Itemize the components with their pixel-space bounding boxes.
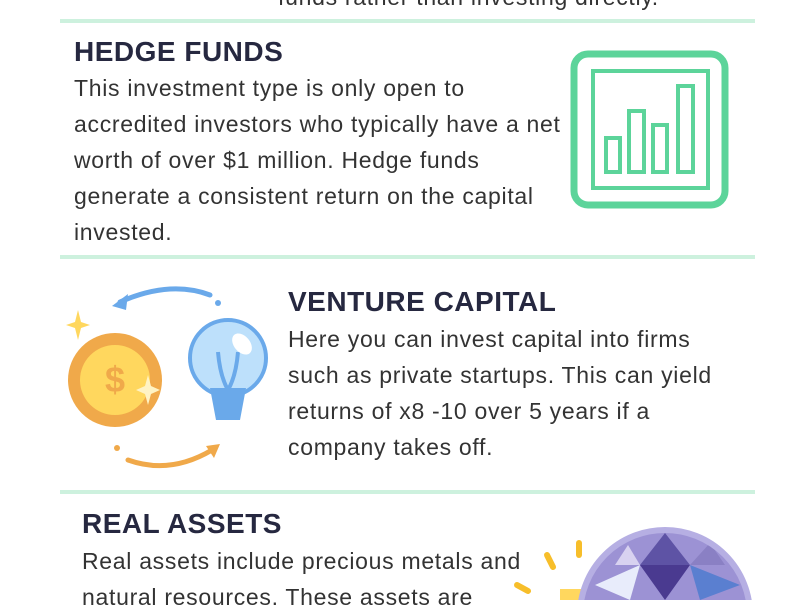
text: venture capital: such as private startups. This can yield [288,362,712,388]
text: venture capital: company takes off. [288,434,493,460]
heading: hedge funds: HEDGE FUNDS [74,36,283,67]
icon: venture coin and bulb [66,286,268,468]
text: real assets: natural resources. These assets are [82,584,473,610]
text: hedge funds: accredited investors who typically have a net [74,111,561,137]
icon: venture coin and bulb: $ [105,359,125,400]
text: real assets [82,548,521,610]
icon: gem [514,527,752,600]
text: hedge funds: worth of over $1 million. Hedge funds [74,147,480,173]
text: venture capital: Here you can invest capital into firms [288,326,690,352]
text: real assets: Real assets include precious metals and [82,548,521,574]
text: hedge funds: This investment type is only open to [74,75,465,101]
text: hedge funds: generate a consistent return on the capital [74,183,534,209]
icon: chart [570,50,728,208]
heading: venture capital: VENTURE CAPITAL [288,286,556,317]
text: hedge funds [74,75,561,245]
heading: real assets: REAL ASSETS [82,508,282,539]
text: venture capital [288,326,712,460]
text: venture capital: returns of x8 -10 over 5 years if a [288,398,650,424]
text: hedge funds: invested. [74,219,172,245]
